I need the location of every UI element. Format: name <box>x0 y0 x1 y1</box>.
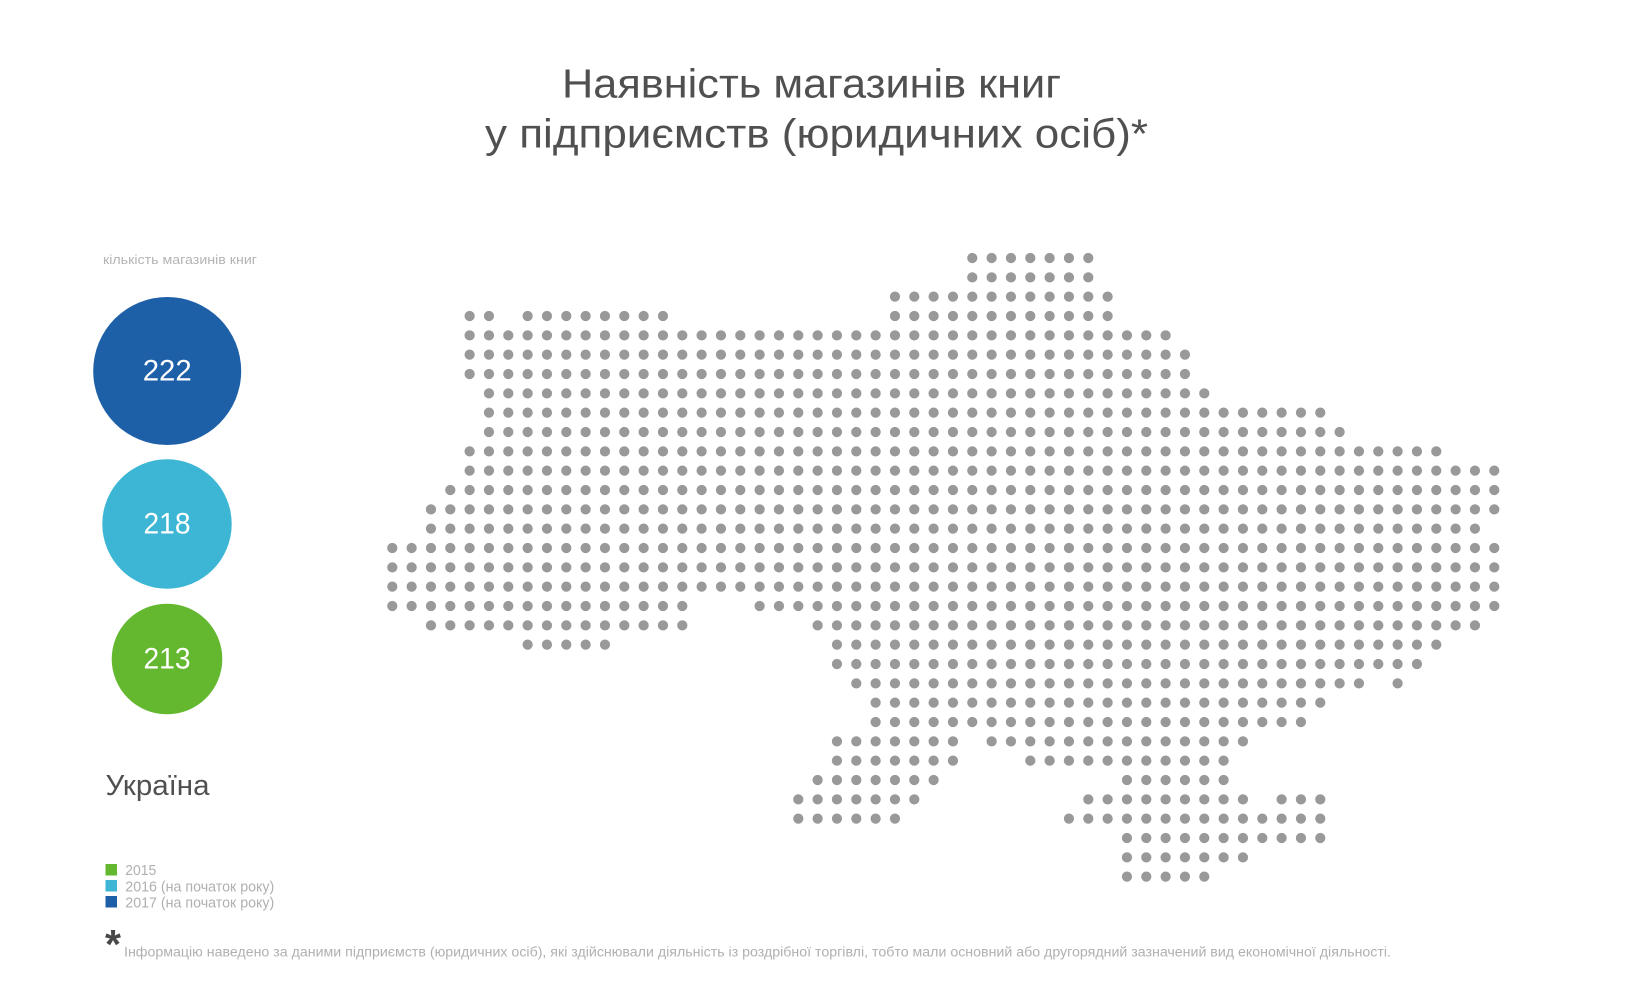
bubble: 2015 <box>112 604 222 714</box>
bubble: 2015: 213 <box>144 642 190 676</box>
dot map of Ukraine <box>392 258 1494 877</box>
region name: Україна <box>106 770 210 802</box>
legend <box>106 862 274 912</box>
title: Наявність магазинів книг <box>562 60 1061 106</box>
bubble: 2017: 222 <box>143 354 192 388</box>
footnote asterisk: * <box>105 921 121 967</box>
bubble: 2016: 218 <box>144 508 190 540</box>
footnote text: Інформацію наведено за даними підприємств (юридичних осіб), які здійснювали діяльність із роздрібної торгівлі, тобто мали основний або другорядний зазначений вид економічної діяльності. <box>124 944 1391 960</box>
bubble: 2016 <box>102 459 232 589</box>
bubble: 2017 <box>93 297 241 445</box>
title: у підприємств (юридичних осіб)* <box>485 110 1148 156</box>
title <box>485 60 1148 156</box>
legend: 2016 (на початок року) <box>125 878 274 896</box>
bubble chart caption: кількість магазинів книг <box>103 252 257 267</box>
legend: 2015 <box>125 862 156 879</box>
legend: 2017 (на початок року) <box>125 894 274 912</box>
